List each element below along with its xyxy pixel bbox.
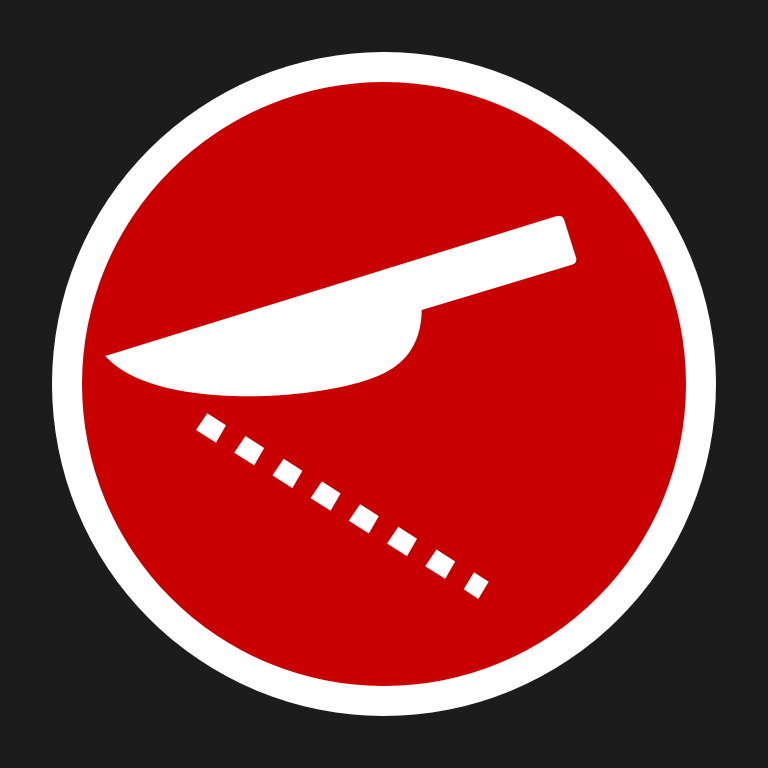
dash 8: [464, 572, 489, 599]
dotted cut line: [196, 413, 489, 599]
red circle: [82, 82, 686, 686]
dash 3: [272, 459, 302, 488]
dash 1: [196, 413, 226, 443]
dash 6: [387, 527, 417, 556]
icon: knife: [105, 216, 576, 396]
dash 7: [425, 550, 455, 579]
white circle border: [52, 52, 716, 716]
dash 5: [349, 504, 379, 534]
dash 2: [234, 436, 264, 465]
dash 4: [311, 481, 341, 511]
